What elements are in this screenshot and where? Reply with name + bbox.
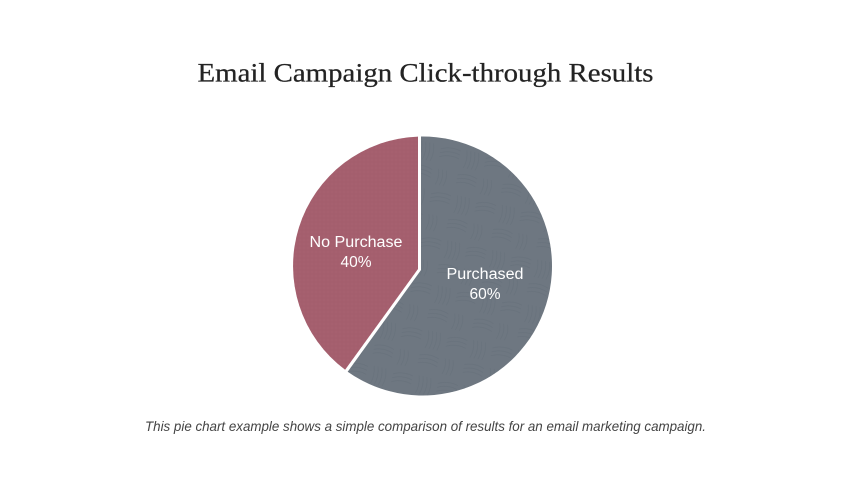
pie chart bbox=[293, 136, 552, 395]
title: Email Campaign Click-through Results bbox=[198, 58, 654, 88]
slice: purchased 60% bbox=[348, 136, 552, 395]
label: purchased: Purchased bbox=[446, 266, 524, 283]
label: no purchase: No Purchase bbox=[310, 234, 402, 251]
slice: no purchase 40% bbox=[293, 137, 418, 370]
caption: This pie chart example shows a simple comparison of results for an email marketing campaign. bbox=[145, 418, 706, 434]
value: 60%: 60% bbox=[469, 286, 501, 303]
value: 40%: 40% bbox=[340, 254, 372, 271]
